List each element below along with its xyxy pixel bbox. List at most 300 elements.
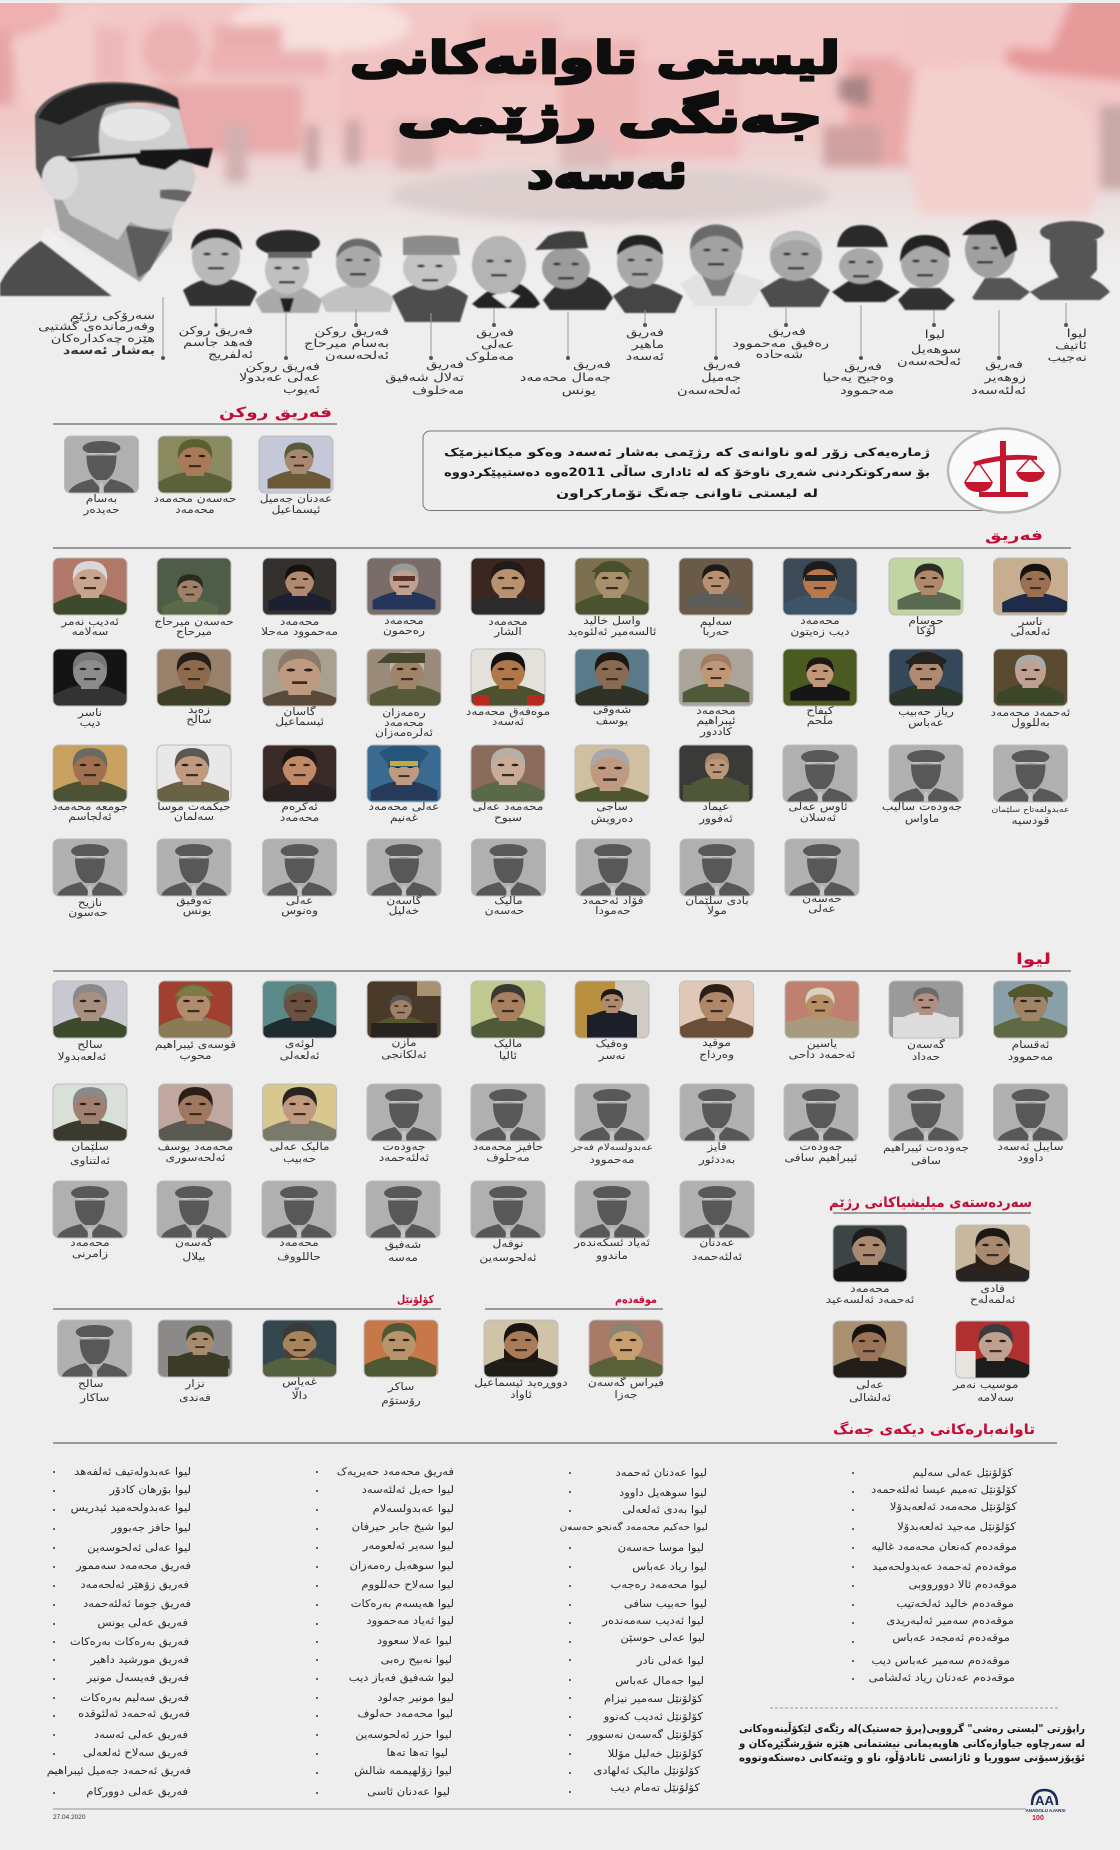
list column 1 [47, 1465, 191, 1799]
caption: general 3: فەریق روکن [315, 326, 389, 338]
officer card [154, 436, 236, 516]
caption: general 9: فەریق [768, 326, 806, 338]
officer card: فادی [980, 1282, 1005, 1295]
officer card: فیراس گەسەن [588, 1376, 664, 1390]
officer card: ناسر [77, 706, 102, 720]
officer card: بەددئور [698, 1153, 735, 1167]
panel: other war criminals lists [47, 1421, 1057, 1799]
officer card [157, 649, 231, 726]
officer card: سەلمان [174, 810, 214, 823]
officer card [826, 1225, 914, 1306]
officer card: فایز [706, 1140, 727, 1154]
officer card [259, 436, 333, 516]
officer card: مازن [391, 1036, 417, 1050]
general portrait 13: silhouette [1030, 221, 1110, 300]
source paragraph: لە سەرچاوە جیاوازەکانی هاوپەیمانی نیشتمانی هێزە شۆڕشگێڕەکان و [738, 1737, 1085, 1750]
officer card: سالح [186, 713, 212, 726]
officer card: ئەیاد ئسکەندەر [573, 1236, 650, 1250]
officer card [832, 1321, 907, 1404]
caption: general 13: لیوا [1067, 328, 1087, 340]
officer card [263, 745, 337, 824]
caption: general 9: رەفیق مەحموود [732, 338, 829, 350]
officer card: محەمەد یوسف [158, 1140, 233, 1154]
caption: general 2: ئەیوب [283, 384, 320, 396]
officer card: محەمەد [488, 615, 528, 628]
officer card [783, 558, 857, 639]
officer card [471, 1084, 545, 1165]
officer card: جەزا [614, 1388, 638, 1402]
officer card: رەحمون [383, 624, 425, 638]
officer card [58, 1320, 132, 1405]
logo: Anadolu Ajansi [1025, 1790, 1066, 1822]
officer card [263, 1320, 337, 1402]
officer card [263, 1084, 337, 1165]
officer card: نزار [184, 1377, 205, 1391]
officer card: حەداد [912, 1050, 940, 1063]
officer card: سەلامە [72, 625, 108, 638]
caption: Bashar al-Assad: بەشار ئەسەد [63, 345, 155, 357]
officer card: زامرنی [72, 1247, 108, 1261]
general portrait 3 [320, 238, 394, 312]
list column 4: کۆلۆنێل محەمەد ئەلعەبدۆلا [890, 1500, 1018, 1513]
officer card: حەسەن میرحاج [154, 615, 234, 629]
logo: Anadolu Ajansi: 100 [1032, 1815, 1044, 1822]
officer card: سالح [78, 1377, 103, 1390]
officer card [367, 981, 441, 1061]
officer card [785, 981, 859, 1061]
officer card: شەفیق [385, 1238, 421, 1252]
officer card: مولا [707, 904, 727, 918]
officer card: داوود [1018, 1151, 1043, 1165]
officer card: ئیسماعیل [272, 503, 320, 516]
list column 4: موقەدەم عەدنان ریاد ئەلشامی [869, 1671, 1015, 1684]
officer card: موسیب نەمر [952, 1378, 1018, 1392]
officer card [472, 839, 546, 917]
officer card [994, 1084, 1068, 1165]
top edge strip [0, 0, 1120, 3]
caption: general 12: ئەلئەسەد [971, 385, 1026, 397]
officer card: عەبدولسەلام فەجر [570, 1143, 653, 1153]
list column 2: لیوا ئەیاد مەحموود [366, 1614, 454, 1627]
list column 2: لیوا عەبدولسەلام [373, 1502, 454, 1515]
caption: general 7: ماهیر [631, 339, 664, 351]
officer card [157, 839, 231, 918]
list column 3: لیوا موسا حەسەن [618, 1541, 704, 1554]
caption: general 11: لیوا [925, 329, 945, 341]
heading: موقەدەم [615, 1293, 657, 1306]
officer card [471, 1181, 545, 1265]
officer card: محەمەد [175, 503, 215, 516]
caption: general 5: فەریق [476, 327, 514, 339]
caption: general 9 [732, 308, 829, 361]
panel: سەردەستەی میلیشیاکانی رژێم [826, 1195, 1033, 1404]
caption: general 2 [239, 312, 320, 396]
officer card: محەمەد [384, 614, 424, 627]
officer card [471, 981, 545, 1062]
caption: general 1 [179, 308, 253, 361]
officer card [679, 745, 753, 826]
list column 1: لیوا عەبدولەتیف ئەلفەهد [74, 1465, 191, 1478]
officer card: ماواس [905, 812, 939, 826]
officer card [263, 981, 338, 1062]
officer card: جومعە محەمەد [52, 800, 128, 814]
officer card: لۆکا [916, 624, 936, 638]
officer card: ئەسلان [800, 811, 836, 824]
list column 4: موقەدەم سەمیر ئەلبەریدی [886, 1614, 1014, 1627]
list column 1: لیوا بۆرهان کادۆر [108, 1483, 191, 1496]
generals row portraits [183, 220, 1110, 322]
list column 2: لیوا حزر ئەلحوسەین [355, 1728, 452, 1741]
officer card: میرحاج [176, 625, 212, 639]
officer card [783, 745, 857, 824]
officer card: حوسام [908, 614, 944, 628]
panel: فەریق روکن [53, 405, 337, 517]
list column 2: لیوا زۆلهیممە شالش [354, 1764, 452, 1777]
officer card: قوسەی ئیبراهیم [155, 1038, 236, 1052]
officer card: ئەلجاسم [68, 810, 112, 823]
officer card [262, 648, 338, 726]
general portrait 12 [962, 220, 1030, 300]
caption: general 3 [304, 310, 389, 362]
officer card: محەمەد [70, 1236, 110, 1249]
list column 4: کۆلۆنێل مەجید ئەلعەبدۆلا [897, 1520, 1017, 1533]
list column 2: لیوا عەلا سعوود [377, 1634, 452, 1647]
header background: war-damaged street collage in pink [0, 0, 1120, 265]
officer card: دیب زەیتون [790, 625, 850, 639]
caption: general 1: فەهد جاسم [183, 337, 253, 349]
officer card: محەمەد [279, 1236, 319, 1249]
list column 1: فەریق سەلاح ئەلعەلی [83, 1746, 188, 1760]
list column 1: فەریق محەمەد سەممور [75, 1559, 191, 1573]
officer card: محەمەد [280, 811, 319, 824]
officer card: مەحلوف [486, 1151, 530, 1165]
footer rule [53, 1808, 1026, 1810]
officer card: ساجی [596, 800, 628, 813]
panel: لیوا [53, 950, 1071, 1265]
officer card: بادی سلێمان [685, 894, 749, 907]
list column 3: لیوا سوهەیل داوود [619, 1486, 707, 1499]
list column 3: کۆلۆنێل سەمیر نیزام [604, 1692, 704, 1705]
officer card: ئەلشالی [849, 1391, 891, 1404]
officer card: جەودەت [382, 1140, 426, 1154]
list column 4: موقەدەم ئالا دوورووبی [908, 1578, 1017, 1591]
general portrait 11 [898, 235, 955, 310]
panel: موقەدەم [474, 1293, 664, 1402]
officer card [53, 839, 127, 920]
list column 4: موقەدەم ئەمجەد عەباس [892, 1631, 1010, 1644]
officer card: ماندوو [595, 1249, 628, 1263]
officer card [785, 839, 859, 915]
officer card: دەرویش [591, 812, 633, 826]
heading: تاوانەبارەکانی دیکەی جەنگ [833, 1421, 1035, 1438]
caption: general 8: فەریق [703, 359, 741, 371]
general portrait 7 [613, 235, 683, 313]
officer card: گەسەن [175, 1236, 214, 1249]
list column 1: لیوا عەلی ئەلحوسەین [87, 1541, 191, 1554]
list column 1: فەریق عەلی دوورکام [86, 1785, 188, 1799]
list column 3: کۆلۆنێل ئەدیب کەنوو [603, 1710, 704, 1723]
officer card: محەمەد [384, 716, 424, 729]
list column 2: لیوا محەمەد حەلوف [358, 1707, 453, 1720]
officer card: محەمەد [850, 1282, 890, 1295]
list column 3: لیوا بەدی ئەلعەلی [622, 1503, 707, 1516]
officer card: ئەلمەلەح [970, 1293, 1015, 1306]
caption: general 5: عەلی [481, 339, 514, 351]
caption: general 11: سوهەیل [911, 344, 961, 356]
officer card: ساکر [387, 1380, 414, 1394]
officer card: زەید [188, 703, 210, 717]
officer card [53, 558, 127, 638]
list column 3: کۆلۆنێل مالیک ئەلهادی [593, 1764, 701, 1777]
officer card: یاسین [807, 1037, 837, 1051]
officer card: یونس [183, 904, 211, 918]
caption: Bashar al-Assad: سەرۆکی رژێم [70, 310, 155, 322]
officer card: جەودەت [799, 1140, 843, 1154]
caption: general 8: جەمیل [701, 372, 741, 384]
list column 4: کۆلۆنێل عەلی سەلیم [913, 1466, 1014, 1479]
general portrait 6 [535, 231, 613, 310]
caption: Bashar al-Assad [38, 297, 165, 360]
officer card: عەدنان جەمیل [260, 492, 332, 505]
officer card: نەسر [598, 1049, 625, 1063]
caption: general 5 [465, 308, 514, 363]
source paragraph [738, 1708, 1085, 1764]
officer card: حافیز محەمەد [473, 1140, 543, 1154]
officer card: ئەفوور [698, 812, 733, 826]
officer card [53, 1181, 127, 1261]
officer card: تەوفیق [176, 894, 212, 908]
officer card: سایبل ئەسەد [997, 1140, 1064, 1153]
officer card: غەیاس [282, 1375, 317, 1388]
officer card: ئەسەد [492, 715, 524, 728]
officer card: ئەقسام [1012, 1038, 1049, 1051]
heading: لیوا [1016, 950, 1051, 968]
officer card: خەلیل [389, 904, 419, 917]
officer card: ئالیا [499, 1049, 517, 1062]
officer card: الشار [493, 625, 522, 639]
caption: general 3: بەسام میرحاج [304, 338, 389, 350]
general portrait 5 [472, 236, 540, 308]
officer card: ساکار [79, 1391, 109, 1405]
officer card [64, 436, 138, 517]
list column 2: لیوا سەیر ئەلعومەر [362, 1539, 454, 1552]
officer card: ئەحمەد محەمەد [991, 706, 1070, 719]
officer card: کاددور [699, 725, 733, 739]
officer card: کیفاح [806, 704, 834, 717]
officer card: سەلامە [977, 1391, 1014, 1404]
officer card: غەنیم [390, 811, 418, 824]
officer card: دیب [80, 716, 100, 729]
officer card [574, 744, 650, 824]
officer card: دووڕەید ئیسماعیل [474, 1376, 568, 1390]
general portrait 9 [760, 231, 830, 307]
officer card: عیماد [702, 800, 730, 813]
source paragraph: ئۆپۆزسیۆنی سووریا و ئاژانسی ئانادۆڵو، ناو و وێنەکانی دەستکەوتووە [739, 1751, 1085, 1764]
title [350, 33, 840, 198]
officer card: رۆستۆم [381, 1394, 421, 1408]
officer card [889, 981, 963, 1063]
callout: intro text with scales of justice: بۆ سەرکوتکردنی شەڕی ناوخۆ کە لە ئاداری ساڵی 2011ەوە دەستیپێکردووە [444, 465, 930, 480]
officer card [994, 558, 1069, 638]
source paragraph: راپۆرتی "لیستی رەشی" گرووپی(پرۆ جەستیک)لە رێگەی لێکۆڵینەوەکانی [739, 1722, 1085, 1735]
caption: Bashar al-Assad: وفەرماندەی گشتیی [38, 320, 155, 333]
list column 3: لیوا عەدنان ئەحمەد [616, 1466, 707, 1479]
list column 1: فەریق سەلیم بەرەکات [80, 1691, 189, 1705]
officer card: قودسیە [1012, 814, 1049, 828]
officer card [883, 1084, 969, 1167]
caption: general 7: فەریق [626, 327, 664, 339]
callout: intro text with scales of justice: ژمارەیەکی زۆر لەو ناوانەی کە رژێمی بەشار ئەسەد وەکو میکانیزمێک [444, 445, 930, 460]
caption: general 13: ئاتیف [1055, 340, 1087, 352]
officer card: شەوقی [593, 703, 631, 717]
title: جەنگی رژێمی [398, 91, 822, 143]
officer card [367, 649, 444, 740]
officer card [680, 839, 754, 918]
list column 4: کۆلۆنێل تەمیم عیسا ئەلئەحمەد [871, 1483, 1018, 1496]
officer card: حەبیب [283, 1152, 316, 1165]
list column 4: موقەدەم ئەحمەد عەبدولحەمید [872, 1560, 1017, 1573]
list column 2: فەریق محەمەد حەیریەک [337, 1465, 454, 1479]
caption: general 11: ئەلحەسەن [897, 356, 961, 368]
officer card: نازیح [78, 896, 102, 910]
officer card: حەسەن [802, 892, 842, 905]
general portrait 8 [680, 224, 765, 306]
caption: general 6 [520, 312, 611, 397]
logo: Anadolu Ajansi: ANADOLU AJANSI [1025, 1808, 1066, 1813]
officer card [994, 981, 1068, 1064]
officer card: دالّا [292, 1387, 307, 1402]
officer card [471, 558, 545, 639]
caption: general 2: عەلی عەبدولا [239, 372, 320, 384]
officer card: ئیبراهیم سافی [785, 1151, 857, 1165]
officer card: ئەلئەحمەد [379, 1151, 429, 1164]
officer card: محەمەد [696, 704, 736, 717]
officer card [784, 1084, 858, 1165]
officer card: جەودەت سالیب [882, 800, 962, 814]
officer card: حەربا [702, 625, 730, 639]
heading: سەردەستەی میلیشیاکانی رژێم [829, 1195, 1032, 1211]
caption: general 12 [971, 310, 1026, 397]
list column 3: لیوا محەمەد رەجەب [610, 1578, 707, 1591]
officer card: رەمەزان [382, 706, 426, 720]
officer card: سبوح [494, 811, 522, 825]
officer card [573, 1181, 650, 1263]
list column 4: موقەدەم کەنعان محەمەد غالیە [871, 1540, 1017, 1553]
officer card: ئاوس عەلی [788, 800, 848, 814]
officer card: مالیک عەلی [270, 1140, 330, 1153]
list column 2: لیوا حەیل ئەلئەسەد [362, 1483, 454, 1496]
list column 1: فەریق ئەحمەد ئەلئوقدە [78, 1707, 190, 1721]
officer card: مەحموود [1008, 1050, 1053, 1064]
list column 2: لیوا شیخ جابر حیرفان [352, 1520, 454, 1533]
list column 3: لیوا ریاد عەباس [632, 1560, 707, 1573]
officer card: ئەدیب نەمر [60, 615, 119, 629]
officer card: بەسام [86, 492, 117, 505]
caption: general 4: تەلال شەفیق [385, 372, 464, 384]
officer card: محەمەد [800, 614, 840, 627]
officer card: جەودەت ئیبراهیم [883, 1141, 969, 1155]
officer card [158, 1084, 233, 1165]
officer card [158, 1320, 232, 1404]
officer card [367, 1084, 441, 1164]
list column 3: لیوا عەلی حوسێن [620, 1631, 705, 1644]
caption: general 12: فەریق [985, 359, 1023, 371]
list column 2: لیوا تەها تەها [387, 1746, 448, 1759]
logo: Anadolu Ajansi: AA [1035, 1793, 1054, 1808]
officer card [52, 745, 128, 823]
caption: general 6: جەمال محەمەد [520, 372, 611, 384]
officer card: ئەلکانجی [381, 1048, 427, 1061]
caption: Bashar al-Assad: هێزە چەکدارەکان [51, 333, 155, 345]
list column 2: لیوا هەیسەم بەرەکات [351, 1597, 454, 1610]
caption: general 8 [677, 308, 741, 397]
officer card: عەلی [286, 894, 313, 907]
list column 1: فەریق فەیسەل مونیر [86, 1671, 189, 1685]
list column 2: لیوا نەبیح رەبی [381, 1653, 452, 1666]
officer card: عەلی [808, 902, 836, 915]
officer card: ئەحمەد داحی [789, 1048, 855, 1061]
caption: general 10: مەحموود [840, 385, 894, 397]
heading: فەریق روکن [219, 405, 332, 421]
officer card: ئەلعەلی [280, 1049, 320, 1062]
officer card [157, 1181, 231, 1263]
general portrait 1 [183, 229, 257, 306]
officer card: بەللوول [1011, 716, 1050, 730]
officer card: عەلی [856, 1378, 884, 1391]
officer card: سافی [911, 1154, 941, 1167]
officer card [568, 558, 656, 639]
officer card: ئیسماعیل [275, 715, 324, 728]
officer card [366, 1181, 440, 1264]
officer card: ئاواد [510, 1388, 532, 1402]
officer card [680, 1181, 754, 1263]
officer card: فەندی [179, 1391, 211, 1404]
list column 4 [852, 1466, 1018, 1684]
officer card [471, 745, 545, 825]
officer card: وەرداج [699, 1048, 734, 1062]
officer card: محەمەد عەلی [473, 800, 543, 813]
list column 1: فەریق ئەحمەد جەمیل ئیبراهیم [47, 1764, 191, 1778]
officer card: مالیک [494, 1037, 522, 1050]
officer card [882, 745, 963, 826]
officer card [588, 1320, 664, 1402]
officer card: گاسان [283, 705, 316, 718]
caption: general 3: ئەلحەسەن [325, 350, 389, 362]
officer card: ئەلحەسوری [166, 1151, 225, 1165]
officer card [261, 558, 338, 639]
caption: general 10 [822, 305, 894, 397]
list column 3: لیوا عەلی نادر [636, 1654, 704, 1667]
officer card: ئەحمەد ئەلسەعید [826, 1293, 914, 1306]
officer card: عەدنان [699, 1236, 735, 1249]
caption: general 12: زوهەیر [983, 372, 1026, 384]
officer card: ئەلئەحمەد [692, 1250, 742, 1263]
officer card [570, 1084, 653, 1167]
officer card [680, 1084, 754, 1167]
officer card [679, 558, 753, 639]
officer card: گاسەن [386, 894, 422, 907]
officer card [474, 1320, 568, 1402]
caption: general 7 [626, 310, 664, 363]
officer card: لوئەی [285, 1037, 314, 1051]
officer card [155, 981, 236, 1063]
officer card: حەیدەر [82, 503, 120, 517]
officer card: یوسف [596, 714, 628, 728]
officer card [575, 981, 649, 1063]
list column 2: لیوا عەدنان ئاسی [367, 1785, 450, 1798]
officer card [889, 649, 963, 729]
officer card: مەحموود [589, 1153, 635, 1167]
